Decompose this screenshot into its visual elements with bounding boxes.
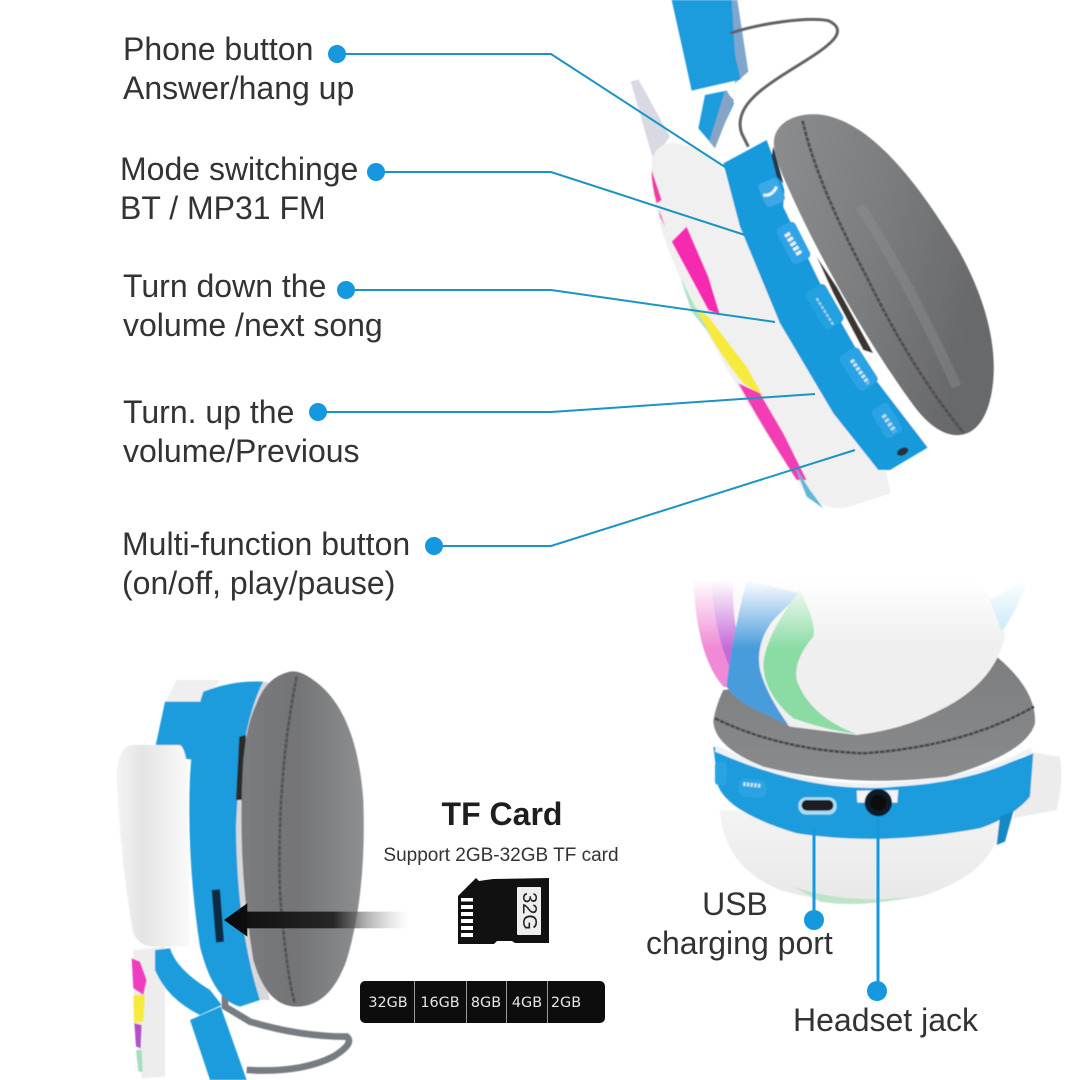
leader lines: ports (814, 818, 878, 990)
callout: multi-function button: Multi-function button (122, 526, 410, 562)
callout: USB charging port (646, 886, 833, 961)
photo: headphone with TF card slot (117, 671, 364, 1080)
callout: volume up: volume/Previous (123, 433, 360, 469)
leader lines: controls to buttons (318, 54, 855, 546)
callout: multi-function button: (on/off, play/pause) (122, 565, 395, 601)
callout: phone button: Phone button (123, 31, 313, 67)
capacity bar: TF card sizes: 2GB (551, 995, 581, 1011)
callout: mode switching: Mode switchinge (120, 151, 358, 187)
text: TF card support: Support 2GB-32GB TF card (383, 845, 619, 866)
arrow: insert TF card (224, 903, 408, 937)
callout: volume up: Turn. up the (123, 394, 294, 430)
photo: headphone bottom view with ports (680, 580, 1061, 904)
icon: 32G TF card: 32G (518, 892, 540, 930)
callout: phone button (123, 31, 354, 106)
icon: 32G TF card (458, 878, 549, 944)
capacity bar: TF card sizes: 32GB (368, 995, 408, 1011)
callout: volume up (123, 394, 360, 469)
callout: headset jack: Headset jack (793, 1002, 979, 1038)
callout: headset jack (793, 981, 979, 1038)
callout: USB charging port: USB (702, 886, 768, 922)
callout: mode switching (120, 151, 385, 226)
callout: volume down: volume /next song (123, 307, 383, 343)
callout: volume down: Turn down the (123, 268, 326, 304)
callout: mode switching: BT / MP31 FM (120, 190, 326, 226)
callout: USB charging port: charging port (646, 925, 833, 961)
capacity bar: TF card sizes: 4GB (512, 995, 542, 1011)
photo: headphone side view with buttons (631, 0, 994, 508)
capacity bar: TF card sizes: 8GB (471, 995, 501, 1011)
capacity bar: TF card sizes: 16GB (420, 995, 460, 1011)
callout: volume down (123, 268, 383, 343)
callout: phone button: Answer/hang up (123, 70, 354, 106)
capacity bar: TF card sizes (360, 981, 605, 1023)
heading: TF Card: TF Card (442, 796, 562, 832)
callout: multi-function button (122, 526, 443, 601)
